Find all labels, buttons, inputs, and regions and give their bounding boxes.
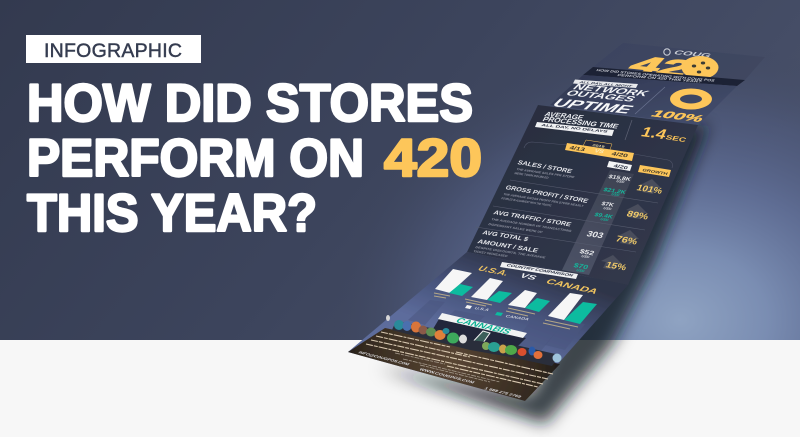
store front xyxy=(430,319,526,352)
body copy lines xyxy=(366,332,553,387)
title: PERFORM ON xyxy=(27,129,364,188)
big number 42: 42 xyxy=(621,52,700,82)
year tag xyxy=(582,140,612,152)
row: sales per store: USD xyxy=(611,192,621,197)
row: gross profit per store: 89% xyxy=(625,209,650,221)
row: sales per store: $15.8K xyxy=(607,175,633,183)
row: average traffic per store: 76% xyxy=(614,234,639,246)
row: average traffic per store: AVG TRAFFIC / STORE xyxy=(492,210,573,228)
stat: 1.4 seconds: 1.4 xyxy=(638,124,670,143)
row dividers xyxy=(476,180,658,252)
panel: question strip: PERFORM ON 420 THIS YEAR? xyxy=(616,74,704,84)
panel: question strip xyxy=(583,67,745,86)
panel: network outages and uptime xyxy=(548,75,737,125)
heading: outages: OUTAGES xyxy=(563,89,639,104)
row: sales per store: WERE TOWN DOUBLED xyxy=(514,171,550,180)
row: average traffic per store: THE AVERAGE NUMBER OF TRANSACTIONS xyxy=(491,217,573,233)
stat: 100 percent: 100% xyxy=(648,109,706,124)
panel: question strip: HOW DID STORES OPERATING WITH COUG POS xyxy=(595,69,716,83)
column tag: 4/20 xyxy=(607,161,632,171)
logo wordmark: COUG xyxy=(672,49,714,59)
footer contacts: 1 888 275 2769 xyxy=(483,386,524,399)
divider xyxy=(635,87,665,114)
heading: average: AVERAGE xyxy=(543,110,585,121)
panel: processing and sales table xyxy=(467,105,698,285)
column tag: growth: GROWTH xyxy=(642,168,669,176)
row: gross profit per store: $7K xyxy=(600,202,615,209)
row: average total amount per sale: $52 xyxy=(578,249,595,257)
date band: 4/20 xyxy=(610,152,629,159)
date band: 4/13 xyxy=(568,146,586,153)
row: average total amount per sale: AVG TOTAL $ xyxy=(481,230,529,243)
bar chart: usa vs canada xyxy=(435,269,597,324)
row: average total amount per sale: USD xyxy=(576,268,586,273)
heading: usa: U.S.A. xyxy=(476,264,512,277)
row: sales per store: $21.2K xyxy=(602,188,628,196)
crowd of people xyxy=(386,315,562,366)
footer contacts: WWW.COUGPOS.COM xyxy=(418,367,476,384)
background: dark blue gradient xyxy=(0,0,800,340)
row: average total amount per sale: AMOUNT / SALE xyxy=(476,239,540,254)
row: sales per store: USD xyxy=(616,179,626,184)
rounded section outline xyxy=(524,142,672,168)
row: average total amount per sale: DESPITE DISCOUNTS, THE AVERAGE xyxy=(475,245,547,259)
row: gross profit per store: GROSS PROFIT / STORE xyxy=(504,185,590,205)
middle column highlight xyxy=(562,170,634,275)
heading: vs: VS xyxy=(518,272,539,281)
column tag: 4/20: 4/20 xyxy=(612,164,629,171)
row: gross profit per store: USD xyxy=(603,206,613,211)
tag: ALL DAY, ALL NIGHT xyxy=(578,81,634,88)
tag: country comparison: COUNTRY COMPARISON xyxy=(505,263,575,277)
row: gross profit per store: USD xyxy=(600,217,610,222)
icon: growth arrows xyxy=(601,179,661,270)
heading: processing time: PROCESSING TIME xyxy=(541,115,620,130)
paper shadow xyxy=(378,125,708,424)
stat: 1.4 seconds xyxy=(638,124,687,144)
title: 420 xyxy=(384,129,482,188)
title: HOW DID STORES xyxy=(27,74,473,133)
row: gross profit per store: $9.4K xyxy=(593,213,615,220)
row: gross profit per store xyxy=(501,185,650,222)
row: sales per store xyxy=(514,160,664,197)
heading: uptime: UPTIME xyxy=(548,97,637,117)
footer contacts: INFO@COUGPOS.COM xyxy=(357,350,411,366)
skyline silhouette xyxy=(408,300,585,352)
store sign: cannabis: CANNABIS xyxy=(454,316,514,336)
footer band xyxy=(348,328,560,401)
row: average total amount per sale: 15% xyxy=(604,260,628,272)
store sign: cannabis xyxy=(438,313,527,338)
title: THIS YEAR? xyxy=(27,184,317,243)
folded infographic paper xyxy=(348,43,765,401)
row: average total amount per sale: $70 xyxy=(572,263,589,271)
panel: country comparison xyxy=(348,252,628,401)
row: average total amount per sale xyxy=(473,230,628,273)
column tag: growth xyxy=(638,165,671,177)
label: infographic tag: INFOGRAPHIC xyxy=(44,40,182,62)
label: infographic tag xyxy=(26,35,201,63)
closing lines xyxy=(395,353,500,382)
row: average traffic per store: 303 xyxy=(585,229,605,240)
tag: all day no delays: ALL DAY, NO DELAYS xyxy=(541,124,609,134)
panel: 420 header xyxy=(593,43,765,82)
tag: country comparison xyxy=(500,262,578,279)
row: average total amount per sale: TICKET INCREASED xyxy=(473,249,509,258)
footer contacts xyxy=(357,350,524,399)
legend: CANADA xyxy=(504,314,531,321)
stat: 1.4 seconds: SEC xyxy=(664,135,687,144)
title xyxy=(27,74,482,243)
row: average traffic per store xyxy=(488,210,639,246)
tag: all day no delays xyxy=(535,122,614,136)
date band: VS xyxy=(593,149,605,155)
icon: coug logo xyxy=(664,49,670,55)
row: average total amount per sale: USD xyxy=(581,254,591,259)
row: sales per store: SALES / STORE xyxy=(516,160,574,175)
icon: zero with leaf dots xyxy=(682,56,718,79)
legend xyxy=(465,305,531,321)
year tag: 2019 xyxy=(592,143,605,149)
background: light floor xyxy=(0,340,800,437)
row: sales per store: THE AVERAGE SALES PER STORE xyxy=(516,167,576,179)
icon: zero ring xyxy=(670,88,712,110)
date band xyxy=(565,143,634,161)
divider xyxy=(625,120,632,140)
row: gross profit per store: THE AVERAGE GROSS PROFIT PER STORE NEARLY xyxy=(503,192,585,208)
heading: canada: CANADA xyxy=(544,277,601,295)
row: average traffic per store: DISPENSARY SALES WERE UP xyxy=(488,222,544,234)
bar labels xyxy=(434,293,578,329)
row: sales per store: 101% xyxy=(635,183,664,196)
row: gross profit per store: DOUBLED IN ALIGNMENT WITH THE TRAFFIC xyxy=(501,196,553,207)
tag xyxy=(573,80,638,88)
heading: network: NETWORK xyxy=(570,83,652,99)
legend: U.S.A xyxy=(473,306,491,312)
